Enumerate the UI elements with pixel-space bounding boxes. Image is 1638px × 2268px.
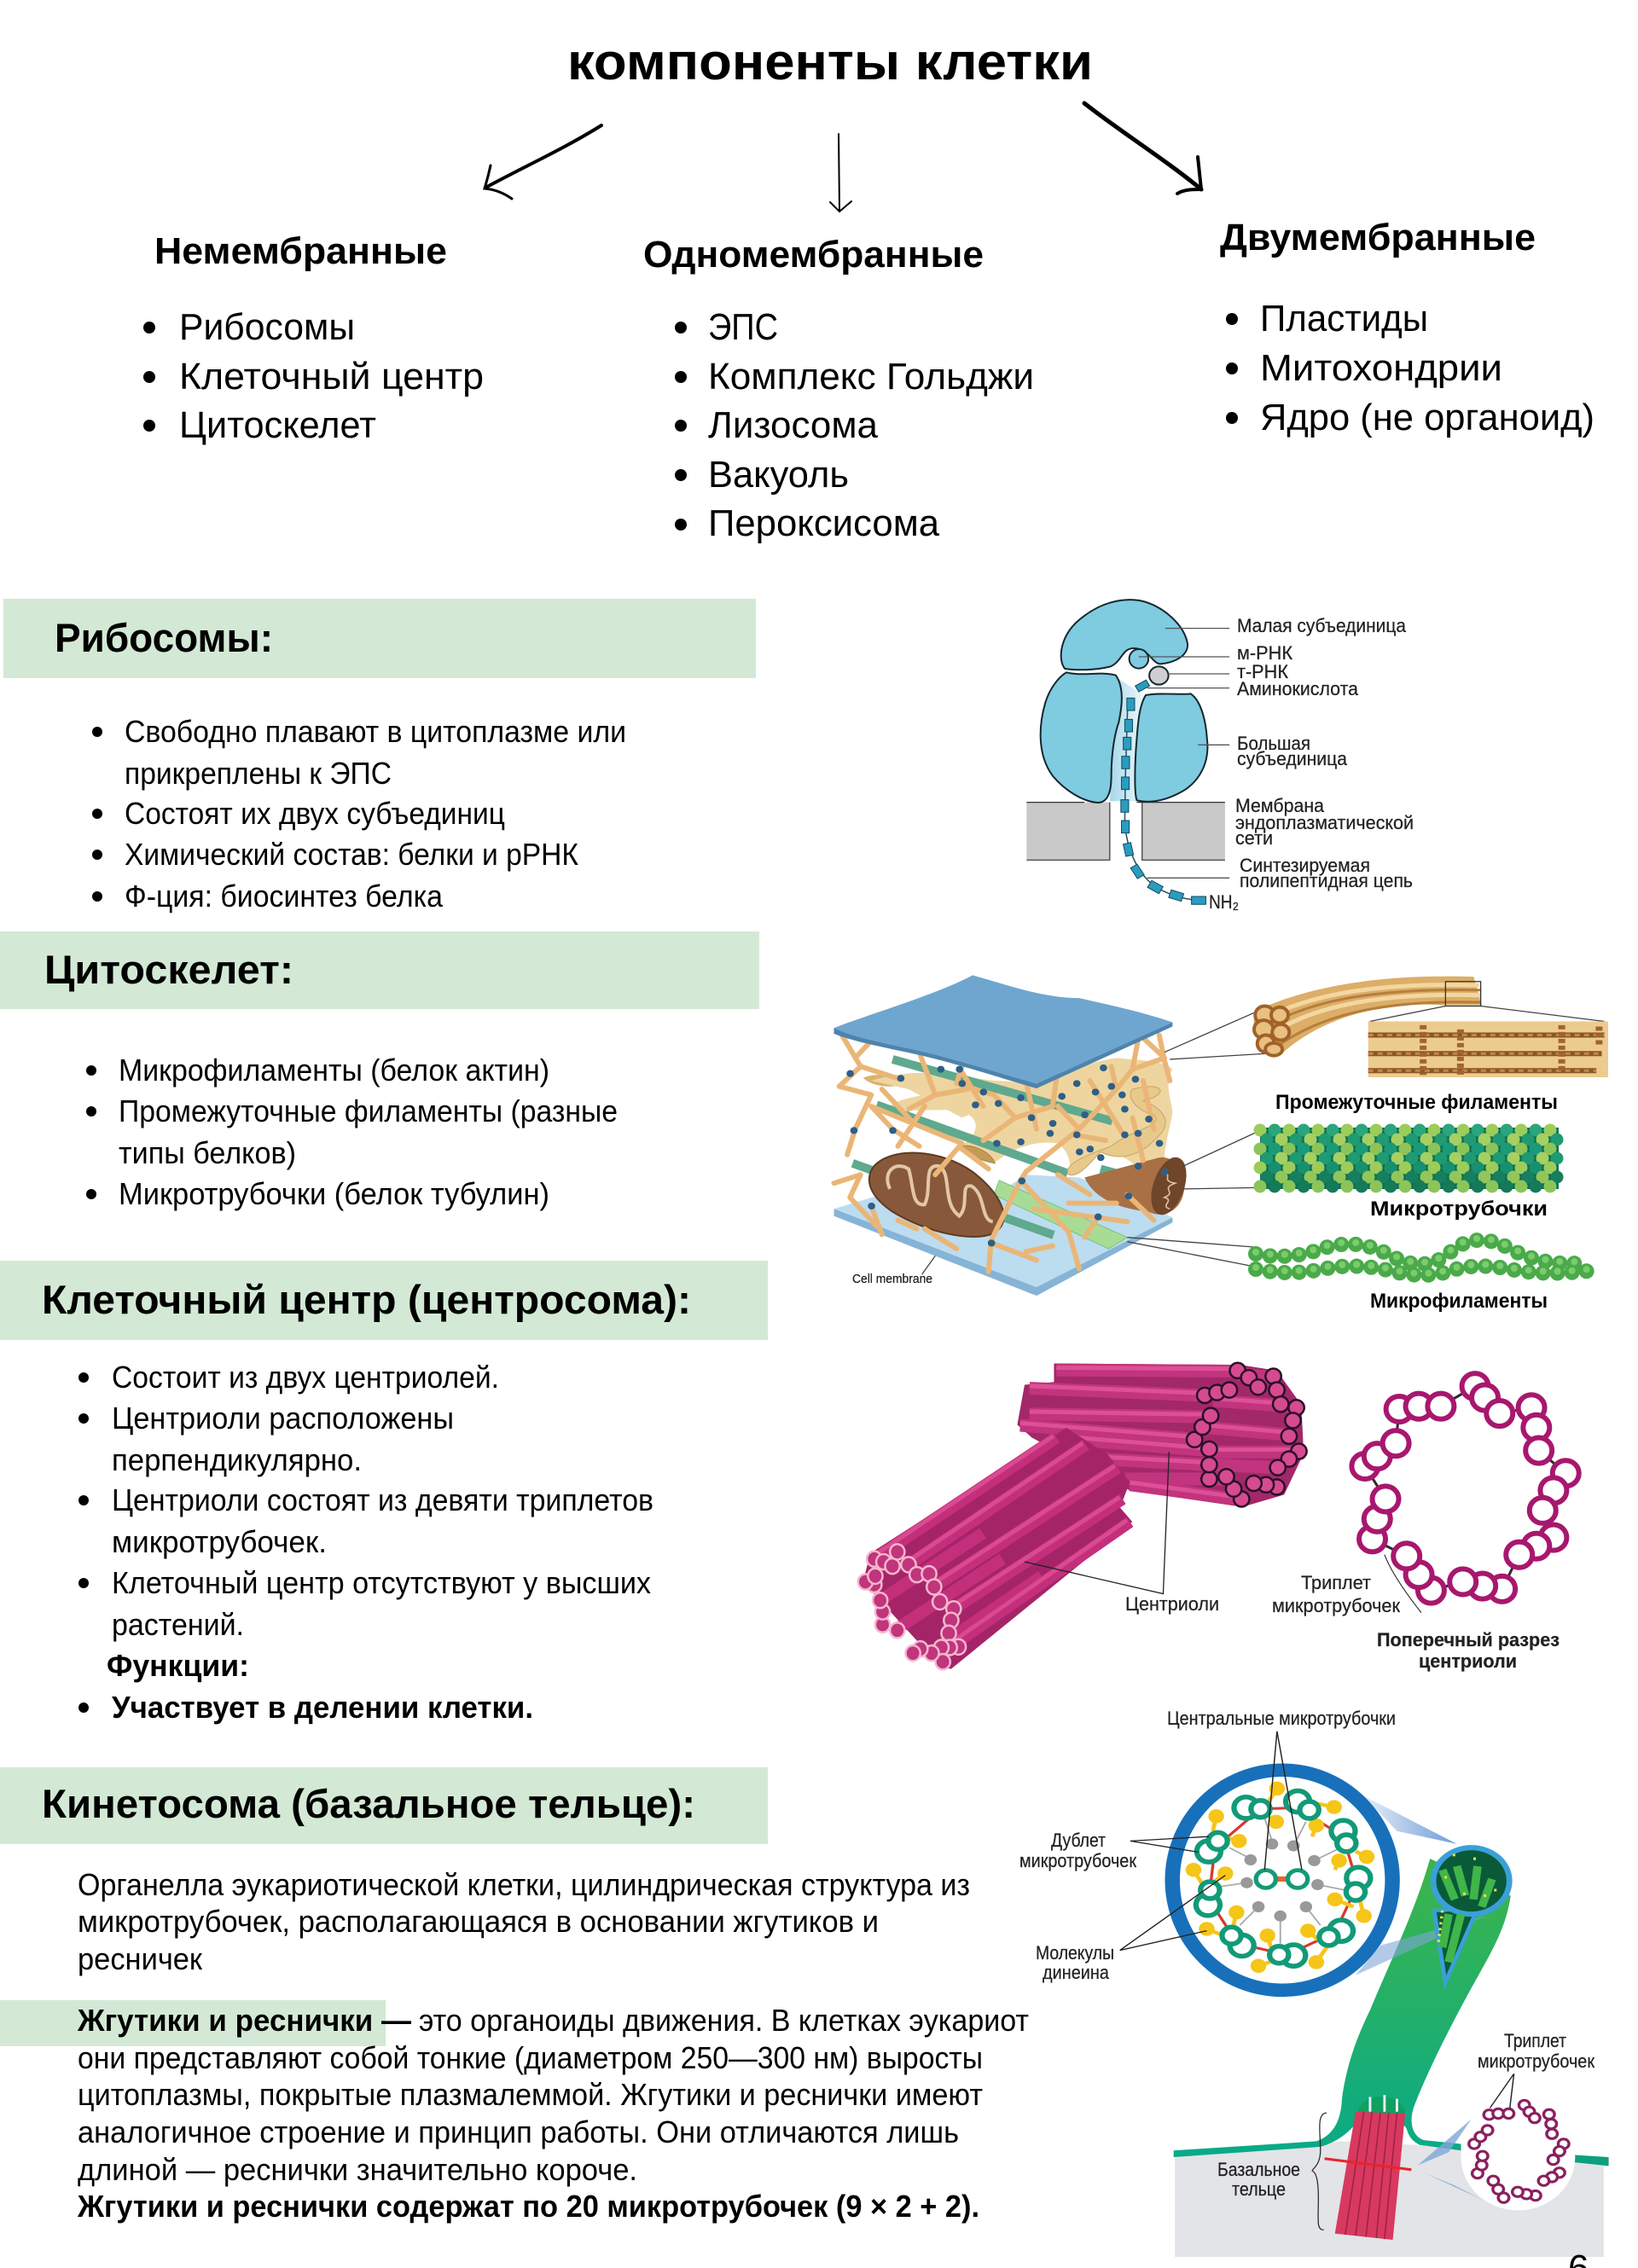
- column: non-membrane organelles: [143, 230, 484, 446]
- ribosome shapes: [1026, 600, 1229, 904]
- heading band: [0, 1261, 768, 1340]
- list: прикреплены к ЭПС: [125, 756, 392, 791]
- list: Состоят их двух субъединиц: [125, 796, 505, 831]
- cell body: [1175, 2141, 1604, 2257]
- arrow: to non-membrane: [485, 125, 601, 199]
- flagellum labels: микротрубочек: [1019, 1850, 1136, 1871]
- list: Клеточный центр: [179, 356, 484, 397]
- list: Функции:: [107, 1648, 249, 1683]
- membrane right segment: [1575, 2155, 1609, 2166]
- flagella and cilia text: [77, 2003, 1029, 2224]
- ribosome labels: полипептидная цепь: [1240, 870, 1413, 891]
- definition text: ресничек: [78, 1941, 202, 1976]
- centriole labels: Центриоли: [1125, 1593, 1219, 1615]
- list: Центриоли состоят из девяти триплетов: [112, 1482, 653, 1517]
- list: Цитоскелет: [179, 404, 376, 446]
- flagellum labels: тельце: [1232, 2178, 1286, 2200]
- ribosome labels: Аминокислота: [1237, 678, 1359, 699]
- intermediate filament: [1254, 977, 1605, 1056]
- list: перпендикулярно.: [112, 1442, 362, 1477]
- heading band: [0, 931, 759, 1009]
- centriole labels: Поперечный разрез: [1377, 1629, 1560, 1650]
- list: Ядро (не органоид): [1260, 397, 1594, 438]
- list: Микрофиламенты (белок актин): [119, 1053, 549, 1088]
- list: Митохондрии: [1260, 347, 1502, 389]
- heading band: Клеточный центр (центросома):: [42, 1277, 691, 1322]
- list: типы белков): [119, 1135, 296, 1170]
- list: Пероксисома: [708, 502, 940, 544]
- list: Ф-ция: биосинтез белка: [125, 879, 444, 914]
- ribosome labels: NH₂: [1209, 891, 1239, 913]
- microtubule: [1260, 1128, 1559, 1189]
- diagram: flagellum: [1019, 1708, 1609, 2257]
- ribosome labels: Малая субъединица: [1237, 615, 1407, 636]
- centriole labels: Триплет: [1301, 1572, 1371, 1593]
- diagram: cytoskeleton: [834, 975, 1608, 1313]
- basal body: [1325, 2095, 1411, 2240]
- flagella and cilia text: они представляют собой тонкие (диаметром 250—300 нм) выросты: [78, 2040, 983, 2075]
- list: Рибосомы: [179, 306, 355, 348]
- ribosome labels: м-РНК: [1237, 642, 1292, 664]
- list: Центриоли расположены: [112, 1401, 454, 1436]
- flagellum labels: микротрубочек: [1478, 2050, 1594, 2072]
- heading: Немембранные: [154, 230, 447, 272]
- heading band: [3, 599, 756, 678]
- list: Пластиды: [1260, 298, 1428, 339]
- title: компоненты клетки: [567, 33, 1093, 90]
- diagram: centrioles: [858, 1363, 1579, 1672]
- flagella and cilia text: Жгутики и реснички —: [77, 2003, 411, 2038]
- arrow: to single-membrane: [830, 134, 851, 212]
- cross-section of axoneme: [1172, 1770, 1392, 1990]
- list: [1226, 298, 1594, 438]
- ribosome labels: [1209, 615, 1414, 913]
- list: Лизосома: [708, 404, 879, 446]
- heading band: Кинетосома (базальное тельце):: [42, 1781, 695, 1826]
- flagellum labels: Молекулы: [1036, 1942, 1114, 1963]
- flagella and cilia text: Жгутики и реснички содержат по 20 микротрубочек (9 × 2 + 2).: [77, 2189, 979, 2224]
- list: Участвует в делении клетки.: [112, 1690, 533, 1725]
- brace: [1312, 2113, 1327, 2230]
- upper centriole: [1017, 1363, 1307, 1507]
- panel: cytoskeleton: [0, 931, 759, 1211]
- zoom cones: [1356, 1796, 1486, 2201]
- definition text: микротрубочек, располагающаяся в основании жгутиков и: [78, 1904, 879, 1939]
- centriole labels: центриоли: [1419, 1650, 1517, 1672]
- ribosome labels: сети: [1235, 827, 1273, 849]
- list: Комплекс Гольджи: [708, 356, 1034, 397]
- flagellum labels: Дублет: [1051, 1830, 1106, 1851]
- basal cross-section: [1461, 2100, 1575, 2210]
- ribosome labels: субъединица: [1237, 748, 1348, 769]
- column: single-membrane organelles: [643, 234, 1034, 544]
- cytoskeleton labels: Микротрубочки: [1370, 1198, 1548, 1221]
- flagella and cilia text: цитоплазмы, покрытые плазмалеммой. Жгутики и реснички имеют: [78, 2077, 983, 2112]
- centriole cross-section: [1351, 1373, 1579, 1613]
- list: [92, 714, 626, 914]
- list: Вакуоль: [708, 454, 849, 496]
- flagellum labels: динеина: [1043, 1962, 1110, 1983]
- ribosome labels: Мембрана: [1235, 795, 1325, 816]
- heading band: [0, 1767, 768, 1844]
- flagella and cilia text: длиной — реснички значительно короче.: [78, 2152, 637, 2187]
- definition text: [78, 1867, 970, 1976]
- flagellum body: [1174, 1859, 1511, 2157]
- highlight: flagella and cilia: [0, 2000, 386, 2046]
- panel: ribosomes: [3, 599, 756, 914]
- lower centriole: [858, 1428, 1132, 1669]
- list: [675, 306, 1034, 544]
- ribosome labels: Синтезируемая: [1240, 855, 1370, 876]
- ribosome labels: Большая: [1237, 733, 1310, 754]
- arrow: to double-membrane: [1084, 103, 1201, 194]
- ribosome labels: т-РНК: [1237, 661, 1288, 682]
- diagram: ribosome: [1026, 600, 1414, 913]
- cytoskeleton labels: Микрофиламенты: [1370, 1290, 1548, 1313]
- list: ЭПС: [708, 306, 778, 348]
- flagellum labels: Центральные микротрубочки: [1167, 1708, 1396, 1729]
- list: Состоит из двух центриолей.: [112, 1360, 499, 1395]
- list: растений.: [112, 1607, 244, 1642]
- heading: Одномембранные: [643, 234, 984, 276]
- list: Клеточный центр отсутствуют у высших: [112, 1565, 651, 1600]
- flagellum cut tip: [1433, 1847, 1509, 1982]
- centriole labels: микротрубочек: [1272, 1595, 1400, 1616]
- cytoskeleton labels: [852, 1091, 1558, 1313]
- column: double-membrane organelles: [1220, 217, 1594, 438]
- cell block drawing: [834, 975, 1608, 1296]
- definition text: Органелла эукариотической клетки, цилиндрическая структура из: [78, 1867, 970, 1902]
- heading band: Рибосомы:: [55, 615, 273, 660]
- flagellum labels: Базальное: [1217, 2159, 1300, 2180]
- list: [78, 1360, 653, 1725]
- flagella and cilia text: аналогичное строение и принцип работы. Они отличаются лишь: [78, 2114, 959, 2149]
- list: микротрубочек.: [112, 1524, 327, 1559]
- heading band: Цитоскелет:: [44, 947, 293, 992]
- list: Микротрубочки (белок тубулин): [119, 1176, 549, 1211]
- cytoskeleton labels: Cell membrane: [852, 1272, 932, 1286]
- flagellum labels: Триплет: [1504, 2030, 1566, 2051]
- flagellum labels: [1019, 1708, 1594, 2200]
- list: [143, 306, 484, 446]
- centriole labels: [1125, 1572, 1560, 1672]
- ribosome labels: эндоплазматической: [1235, 812, 1414, 833]
- filament detail: [1368, 1022, 1608, 1077]
- microfilament: [1256, 1238, 1589, 1275]
- list: Химический состав: белки и рРНК: [125, 837, 578, 872]
- flagella and cilia text: это органоиды движения. В клетках эукариот: [419, 2003, 1029, 2038]
- heading: Двумембранные: [1220, 217, 1536, 258]
- leader lines: [1120, 1731, 1514, 2108]
- panel: kinetosome: [0, 1767, 1029, 2224]
- panel: centrosome: [0, 1261, 768, 1725]
- list: Свободно плавают в цитоплазме или: [125, 714, 626, 749]
- list: Промежуточные филаменты (разные: [119, 1093, 618, 1128]
- cytoskeleton labels: Промежуточные филаменты: [1275, 1091, 1558, 1114]
- list: [86, 1053, 618, 1211]
